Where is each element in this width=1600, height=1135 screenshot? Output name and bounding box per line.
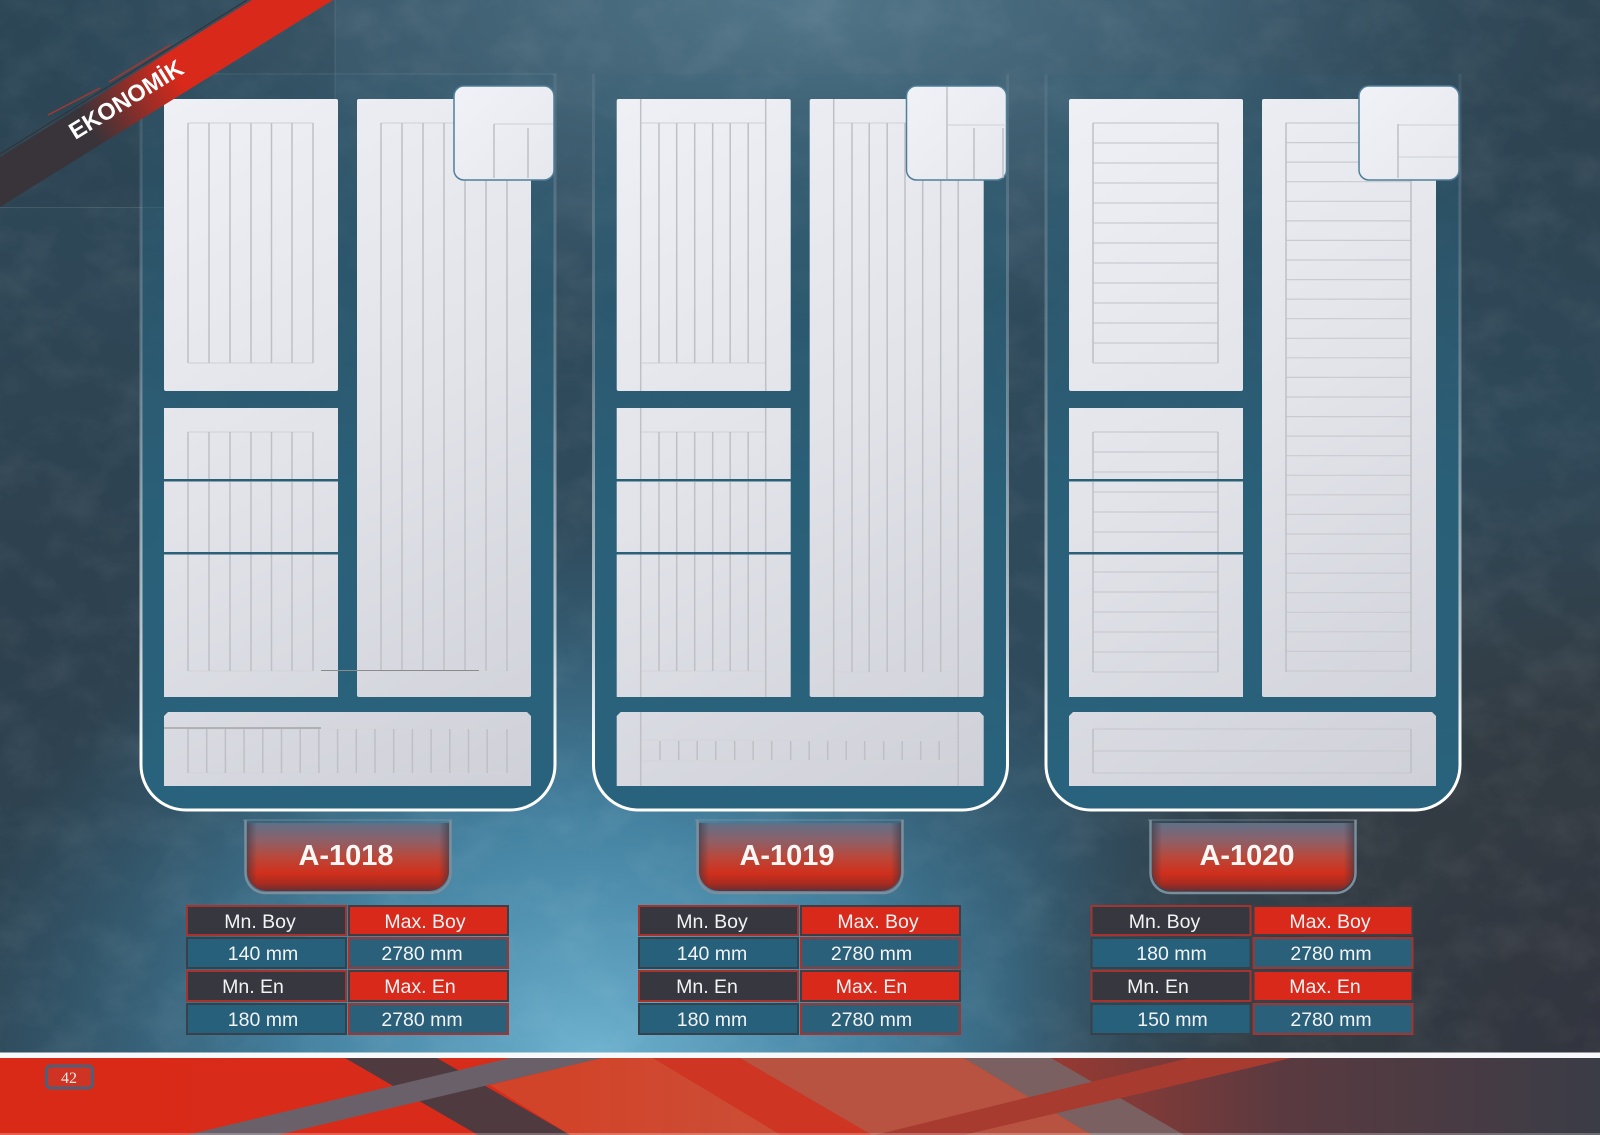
- model badge: [695, 820, 904, 893]
- spec table: 2780 mm: [831, 943, 912, 965]
- ribbon: EKONOMİK: EKONOMİK: [64, 55, 188, 144]
- spec table: [187, 906, 508, 1034]
- spec table: Max. Boy: [837, 911, 919, 933]
- panel outline: [594, 74, 1008, 810]
- spec table: Max. En: [836, 976, 907, 998]
- model badge: [243, 820, 452, 893]
- spec table: [639, 906, 960, 1034]
- page number: 42: [61, 1070, 77, 1087]
- footer white rule: [0, 1052, 1600, 1058]
- spec table: Mn. Boy: [676, 911, 748, 933]
- inset: corner detail: [1359, 86, 1459, 180]
- panel outline: [1046, 74, 1460, 810]
- spec table: 2780 mm: [1290, 943, 1372, 965]
- spec table: 2780 mm: [831, 1009, 912, 1031]
- ribbon: EKONOMİK: [0, 0, 333, 207]
- spec table: 180 mm: [228, 1009, 298, 1031]
- spec table: Max. Boy: [1289, 911, 1371, 933]
- spec table: 140 mm: [228, 943, 298, 965]
- footer red stripe: [653, 1058, 872, 1135]
- spec table: Mn. En: [1127, 976, 1189, 998]
- door set: [617, 99, 984, 786]
- panel: A-1019: [594, 74, 1008, 1034]
- spec table: 2780 mm: [381, 1009, 463, 1031]
- spec table: 180 mm: [677, 1009, 747, 1031]
- door set: [164, 99, 531, 786]
- inset: corner detail: [906, 86, 1006, 180]
- spec table: Max. Boy: [384, 911, 466, 933]
- spec table: Mn. En: [676, 976, 738, 998]
- panel frame: [594, 74, 1008, 810]
- door set: [1069, 99, 1436, 786]
- page number: [46, 1066, 92, 1088]
- panel outline: [141, 74, 555, 810]
- footer bottom tint: [0, 1133, 1600, 1135]
- spec table: [1092, 906, 1412, 1034]
- footer red diagonal: [875, 1058, 1291, 1135]
- spec table: Max. En: [1289, 976, 1361, 998]
- spec table: Max. En: [384, 976, 456, 998]
- footer dark stripe: [345, 1058, 570, 1135]
- spec table: Mn. Boy: [1129, 911, 1201, 933]
- model badge: A-1019: [739, 840, 835, 872]
- panel frame: [1046, 74, 1460, 810]
- footer gray stripe: [187, 1058, 602, 1135]
- model badge: [1148, 820, 1357, 893]
- panel: A-1018: [141, 74, 555, 1034]
- spec table: Mn. Boy: [224, 911, 296, 933]
- footer facet right: [740, 1058, 1092, 1135]
- model badge: A-1018: [298, 840, 394, 872]
- spec table: 180 mm: [1136, 943, 1207, 965]
- panel: A-1020: [1046, 74, 1460, 1034]
- spec table: 140 mm: [677, 943, 747, 965]
- spec table: 2780 mm: [381, 943, 463, 965]
- panel frame: [141, 74, 555, 810]
- footer band: [0, 1058, 1600, 1135]
- spec table: 2780 mm: [1290, 1009, 1372, 1031]
- model badge: A-1020: [1199, 840, 1295, 872]
- spec table: 150 mm: [1137, 1009, 1208, 1031]
- footer light facet: [490, 1058, 781, 1135]
- footer: [0, 1052, 1600, 1135]
- spec table: Mn. En: [222, 976, 284, 998]
- inset: corner detail: [454, 86, 554, 180]
- footer gray stripe right: [964, 1058, 1184, 1135]
